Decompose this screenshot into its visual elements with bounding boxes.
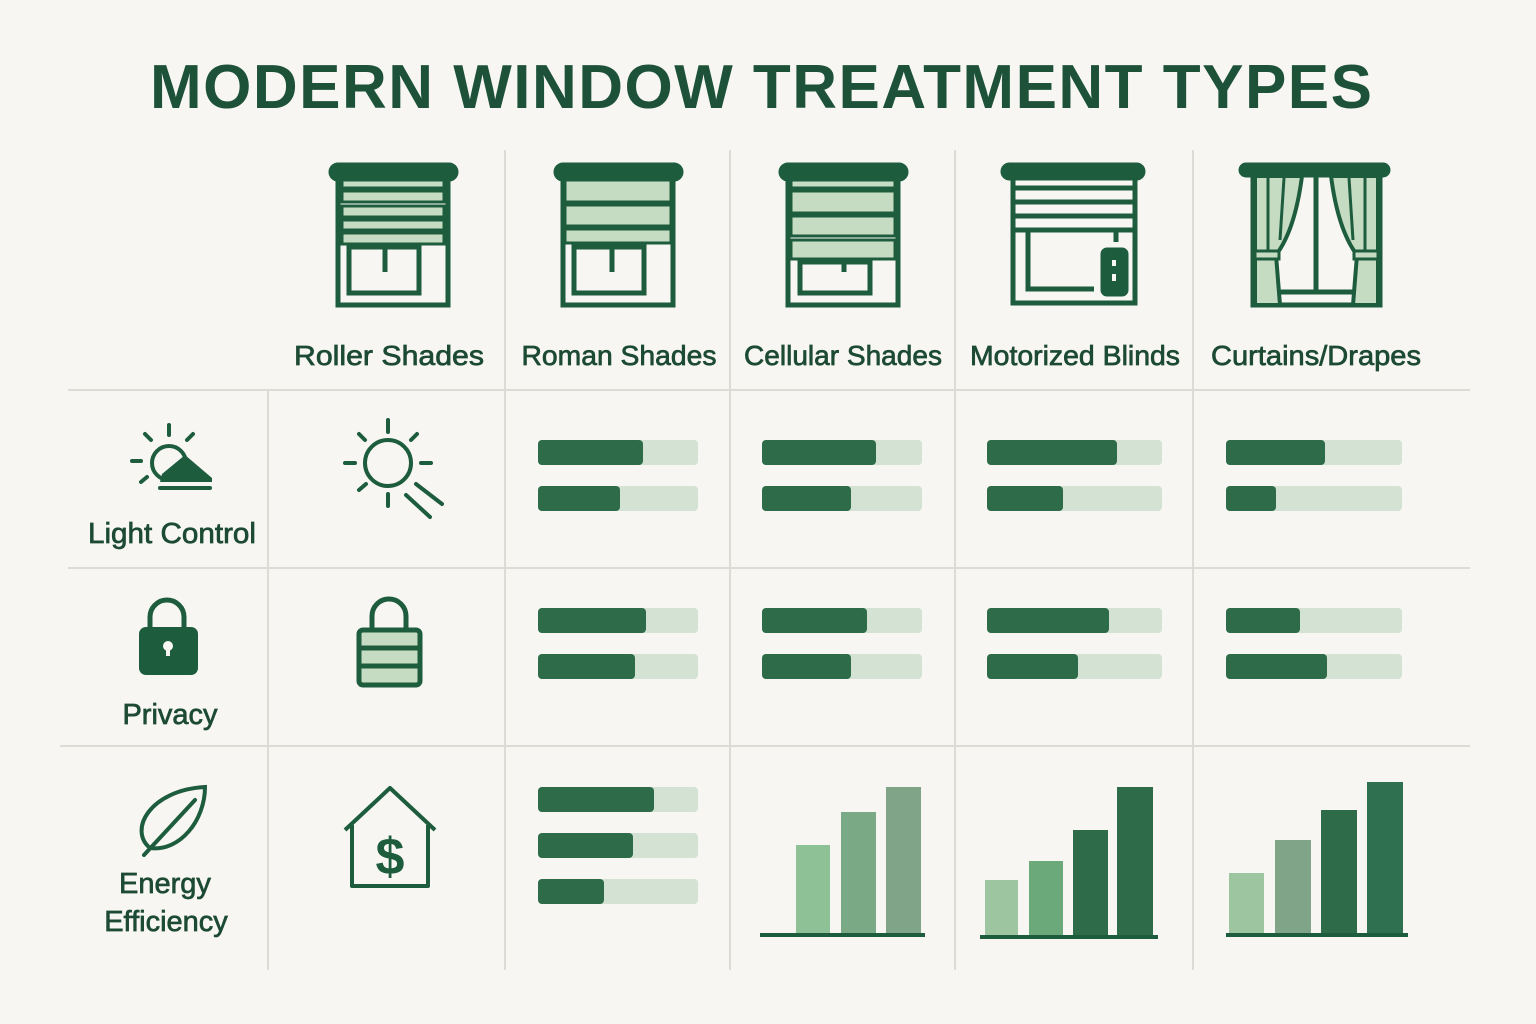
title: MODERN WINDOW TREATMENT TYPES <box>150 53 1372 122</box>
row label: privacy: Privacy <box>122 699 218 731</box>
row label: energy efficiency: Energy <box>119 868 211 900</box>
bars: light control <box>538 440 1402 511</box>
column labels <box>294 340 1421 371</box>
row label: light control: Light Control <box>88 518 256 550</box>
column labels: Curtains/Drapes <box>1211 340 1421 371</box>
icon: motorized blinds <box>1003 165 1143 303</box>
bars: energy roman <box>538 787 698 904</box>
row label: privacy <box>122 600 218 731</box>
column labels: Cellular Shades <box>744 340 942 371</box>
row label: energy efficiency: Efficiency <box>104 906 228 938</box>
icon: house dollar <box>345 788 435 886</box>
icon: privacy lock <box>359 599 420 685</box>
icon: house dollar: $ <box>376 828 405 886</box>
icon: sun <box>345 420 442 517</box>
chart: curtains energy <box>1226 782 1408 935</box>
column labels: Roller Shades <box>294 340 484 371</box>
column labels: Roman Shades <box>522 340 716 371</box>
bars: privacy <box>538 608 1402 679</box>
chart: cellular energy <box>760 787 925 935</box>
column labels: Motorized Blinds <box>970 340 1180 371</box>
icon: roman shades <box>556 165 681 305</box>
chart: motorized energy <box>980 787 1158 937</box>
row label: light control <box>88 425 256 550</box>
icon: curtains <box>1241 165 1388 305</box>
icon: roller shades <box>331 165 456 305</box>
icon: cellular shades <box>781 165 906 305</box>
row label: energy efficiency <box>104 787 228 938</box>
